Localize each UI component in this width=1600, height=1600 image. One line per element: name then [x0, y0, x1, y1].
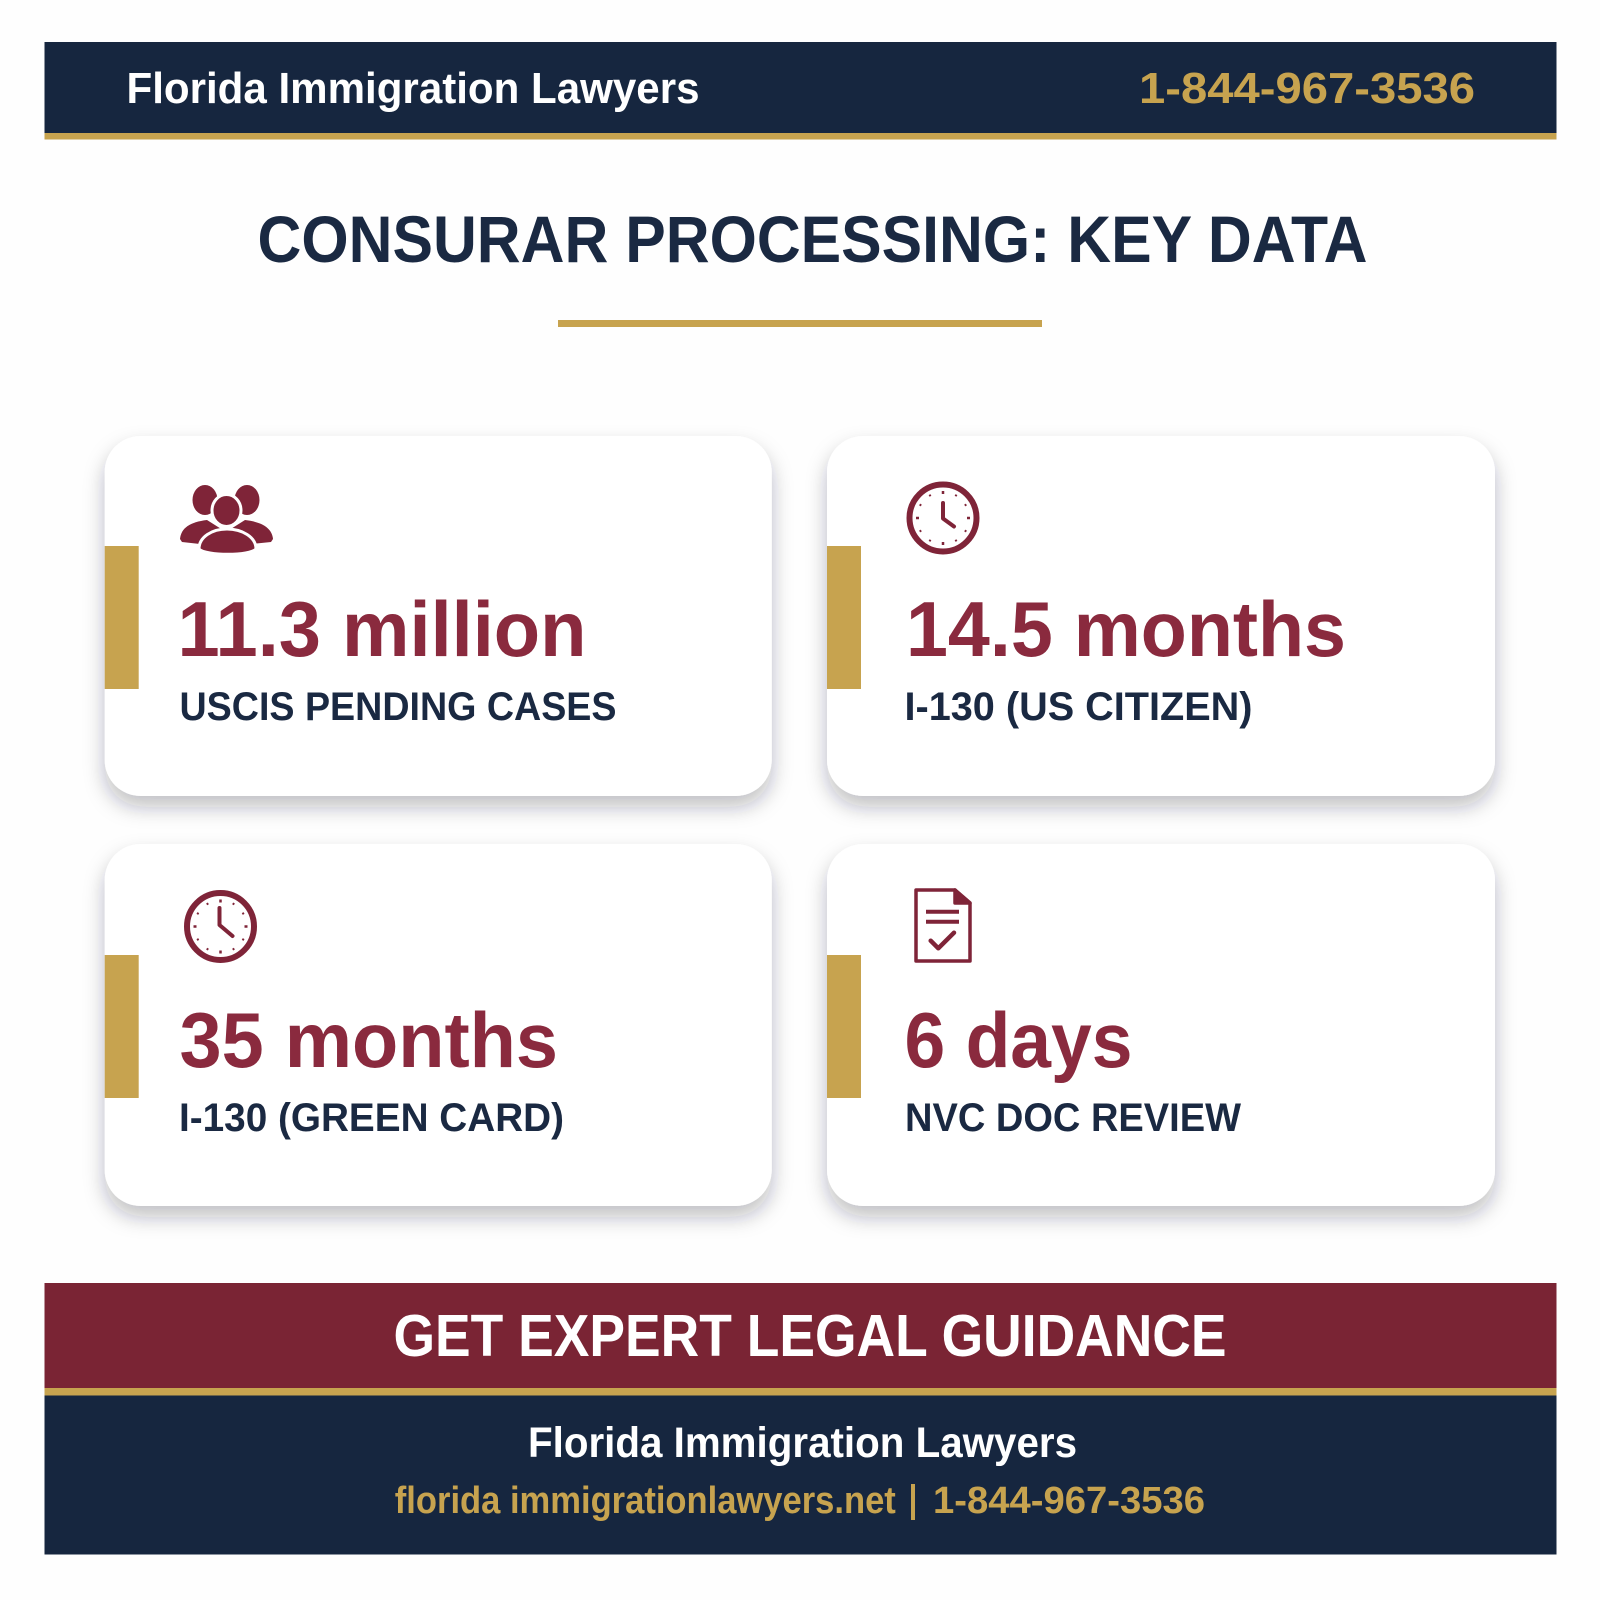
icon: document with check — [916, 890, 970, 961]
footer contact line: florida immigrationlawyers.net — [395, 1480, 896, 1522]
title: CONSURAR PROCESSING: KEY DATA — [258, 202, 1368, 276]
call to action banner — [44, 1283, 1556, 1388]
icon: clock — [187, 893, 254, 960]
panel: I-130 US citizen — [827, 436, 1495, 796]
footer panel — [44, 1388, 1556, 1554]
label: I-130 green card: I-130 (GREEN CARD) — [179, 1096, 564, 1140]
panel: NVC doc review — [827, 844, 1495, 1206]
panel: I-130 green card — [105, 844, 772, 1206]
label: NVC doc review: NVC DOC REVIEW — [905, 1096, 1241, 1140]
title underline — [558, 320, 1042, 327]
value: 14.5 months: 14.5 months — [906, 585, 1346, 673]
call to action text: GET EXPERT LEGAL GUIDANCE — [394, 1303, 1226, 1369]
footer firm name: Florida Immigration Lawyers — [528, 1419, 1077, 1467]
header firm name: Florida Immigration Lawyers — [126, 64, 700, 113]
label: I-130 US citizen: I-130 (US CITIZEN) — [904, 685, 1252, 729]
label: USCIS pending cases: USCIS PENDING CASES — [180, 685, 616, 729]
value: 11.3 million: 11.3 million — [178, 585, 586, 673]
footer contact line: 1-844-967-3536 — [933, 1480, 1205, 1522]
header bar — [44, 42, 1556, 140]
value: 35 months: 35 months — [180, 996, 558, 1084]
panel: USCIS pending cases — [105, 436, 772, 796]
value: 6 days: 6 days — [904, 996, 1132, 1084]
icon: people group — [180, 485, 273, 554]
header phone number: 1-844-967-3536 — [1139, 64, 1475, 113]
footer contact line — [395, 1480, 1205, 1522]
icon: clock — [910, 484, 976, 552]
